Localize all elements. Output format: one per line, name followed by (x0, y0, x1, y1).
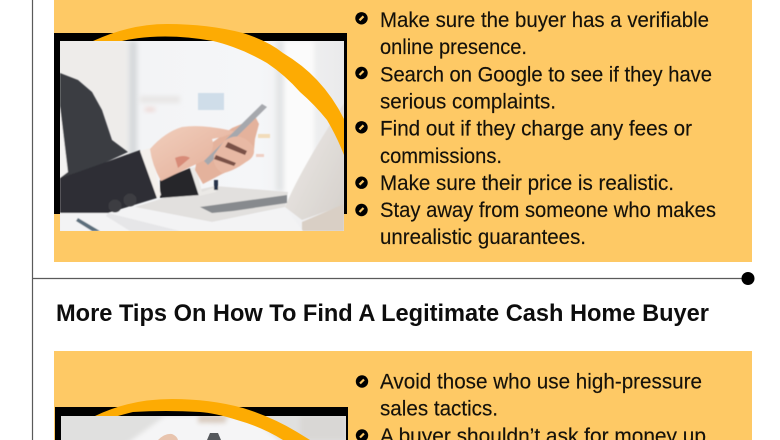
panel: more tips (54, 351, 752, 440)
shirt sliver (60, 106, 68, 178)
keyboard (200, 195, 287, 213)
far sleeve (160, 168, 200, 198)
cuff (140, 148, 161, 198)
bullet 1 (356, 375, 368, 388)
tip 1: online presence. (380, 36, 527, 59)
fingers over phone (214, 137, 254, 173)
back hand (195, 118, 259, 184)
tip 1 (380, 9, 709, 59)
tip 3 (380, 118, 692, 168)
tip 1: Avoid those who use high-pressure (380, 370, 702, 394)
bullet list: more tips (356, 370, 706, 440)
photo: businessman using phone at laptop (60, 41, 344, 231)
tie (207, 433, 221, 440)
tip 1: Make sure the buyer has a verifiable (380, 9, 709, 32)
tip 1 (380, 370, 702, 420)
tip 3: Find out if they charge any fees or (380, 118, 692, 140)
orange arc (95, 399, 310, 440)
tip 1: sales tactics. (380, 398, 498, 420)
image frame (54, 33, 347, 214)
papers and notebook (60, 207, 303, 231)
bullet 2 (355, 67, 368, 79)
laptop base (135, 186, 288, 222)
tip 2: Search on Google to see if they have (380, 64, 712, 86)
tip 2 (380, 64, 712, 114)
sleeve buttons (108, 200, 122, 212)
jacket sleeve (60, 150, 157, 213)
timeline horizontal line (32, 278, 748, 280)
bullet 3 (355, 121, 368, 134)
finger creases (214, 142, 247, 166)
far cuff (190, 167, 218, 196)
bullet 4 (355, 176, 368, 189)
bullet 5 (355, 204, 368, 216)
panel background (54, 351, 752, 440)
tip 3: commissions. (380, 145, 502, 168)
laptop screen (285, 103, 344, 220)
image frame (55, 407, 348, 440)
panel: verification tips (54, 0, 752, 262)
tip 4: Make sure their price is realistic. (380, 172, 674, 195)
desk (302, 204, 344, 231)
tip 5: Stay away from someone who makes (380, 199, 716, 222)
pen (76, 218, 100, 231)
photo: man in shirt and tie (61, 416, 346, 440)
panel background (54, 0, 752, 262)
phone (204, 104, 267, 165)
bullet list: verification tips (355, 9, 716, 249)
orange arc (93, 24, 344, 155)
bullet 2 (356, 429, 368, 440)
tip 5 (380, 199, 716, 249)
heading: more tips: More Tips On How To Find A Legitimate Cash Home Buyer (56, 300, 709, 327)
tip 5: unrealistic guarantees. (380, 226, 586, 249)
timeline dot (742, 272, 754, 285)
suit jacket body (60, 73, 128, 180)
bullet 1 (355, 12, 368, 24)
front hand (150, 126, 236, 181)
tip 2: serious complaints. (380, 90, 556, 114)
timeline vertical line (32, 0, 34, 440)
hand (158, 434, 178, 440)
